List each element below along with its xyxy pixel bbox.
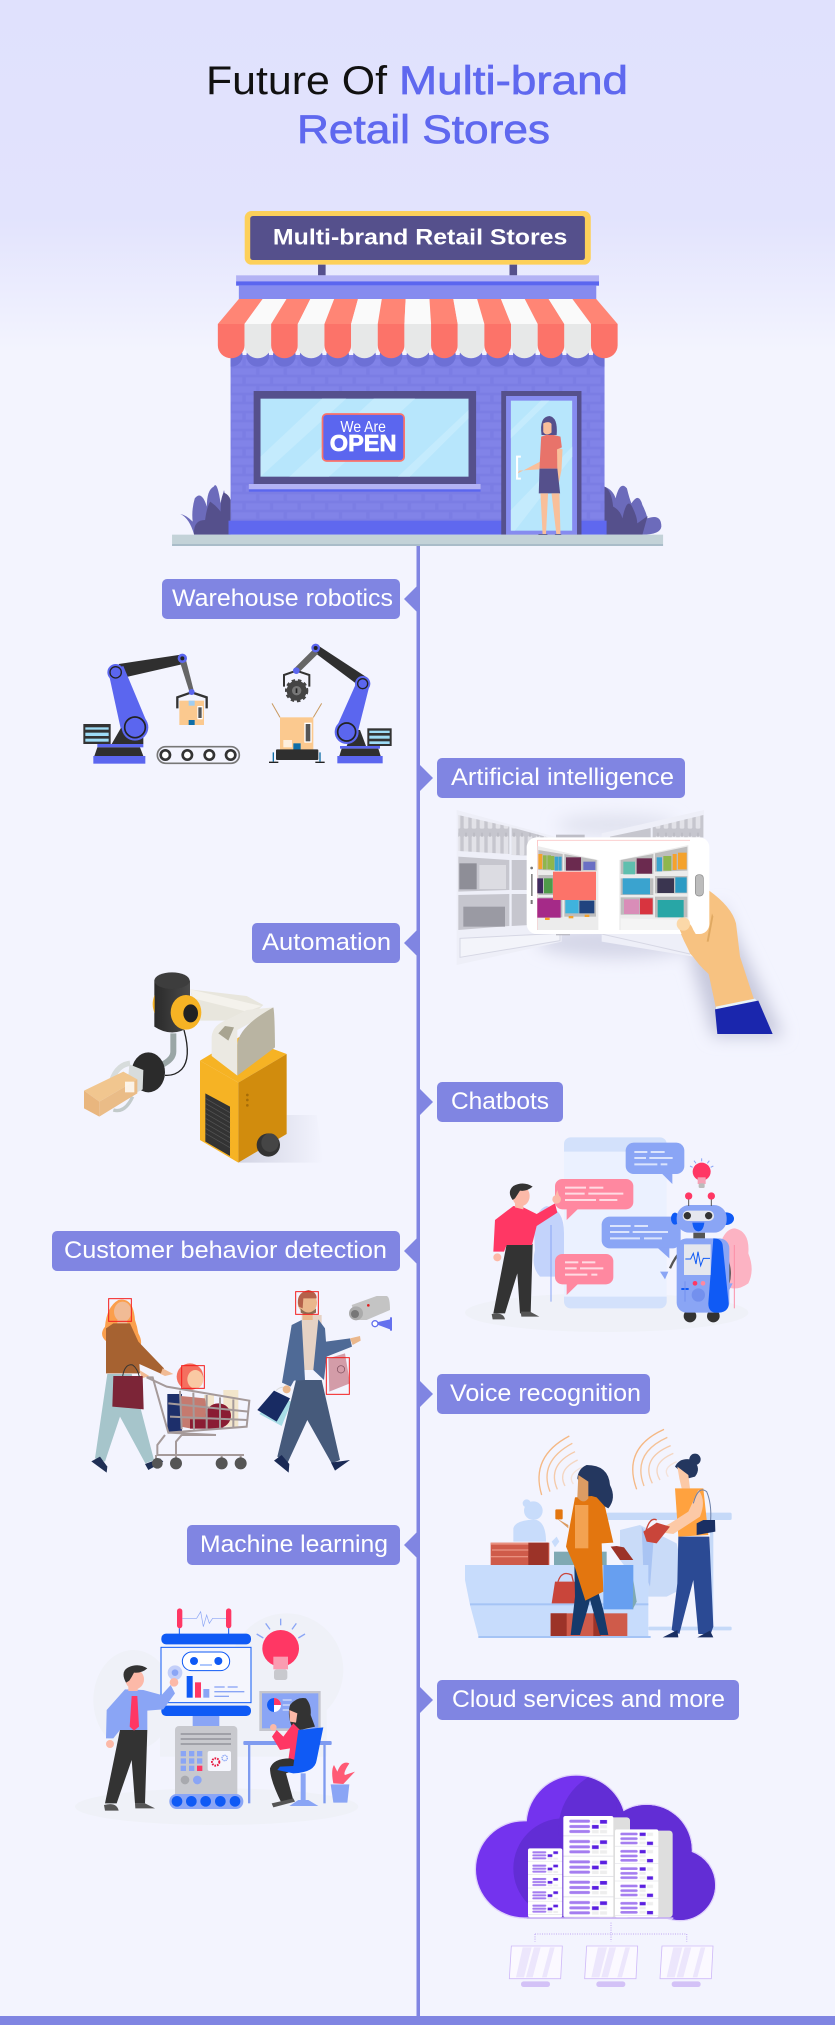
label: Cloud services and more [420, 1680, 739, 1720]
door [501, 391, 581, 535]
right pink tree [722, 1228, 752, 1308]
left robot arm [83, 654, 207, 764]
label: Machine learning: Machine learning [200, 1531, 388, 1558]
gripper [110, 1052, 165, 1111]
open sign: We Are [340, 419, 386, 436]
phone left shelf [537, 846, 598, 930]
woman with handbag [643, 1454, 715, 1637]
label: Customer behavior detection [52, 1231, 417, 1271]
server racks [527, 1816, 673, 1919]
tube and cable [162, 1030, 187, 1075]
lightbulb [690, 1158, 713, 1188]
grey left shelves [457, 810, 562, 965]
client computer 3 [660, 1946, 713, 1987]
label: Voice recognition: Voice recognition [450, 1380, 641, 1407]
sound waves [539, 1429, 677, 1495]
clothes rack [607, 1513, 732, 1630]
awning [218, 299, 618, 358]
blue bubble middle [602, 1217, 681, 1258]
window [249, 391, 481, 492]
soft shadow [537, 815, 783, 1037]
illustration: machine learning team [75, 1608, 358, 1825]
title: Multi-brand [399, 59, 628, 103]
open sign: OPEN [330, 430, 397, 456]
title: Future Of [206, 59, 388, 103]
desk and computer [243, 1691, 332, 1803]
illustration: cloud with servers [470, 1768, 723, 1987]
background top gradient band [0, 0, 835, 350]
label: Warehouse robotics [162, 579, 417, 619]
pavement [172, 535, 663, 546]
illustration: warehouse robots [83, 644, 392, 764]
grey right shelves [602, 810, 704, 958]
cardboard box [84, 1072, 137, 1117]
background blob [75, 1613, 358, 1825]
label: Automation: Automation [262, 929, 391, 956]
cloud [470, 1768, 723, 1923]
man [492, 1183, 561, 1319]
phone controls [530, 867, 703, 904]
title: Retail Stores [297, 108, 550, 152]
illustration: phone AR shelves [457, 810, 783, 1037]
plant [331, 1763, 355, 1803]
blue bubble top [626, 1143, 684, 1184]
counter [465, 1565, 651, 1638]
illustration: automation robot arm [84, 972, 323, 1163]
AR red marker [553, 872, 596, 900]
illustration: chatbot conversation [465, 1137, 752, 1332]
open sign [323, 414, 404, 461]
machine screen [161, 1634, 251, 1726]
client computer 1 [509, 1946, 562, 1987]
label: Chatbots: Chatbots [451, 1088, 549, 1115]
pink bubble top [555, 1179, 633, 1220]
right robot arm [269, 644, 392, 763]
label: Automation [252, 923, 417, 963]
black shoulder [153, 972, 201, 1032]
phone [527, 835, 709, 935]
woman at door [518, 416, 563, 536]
label: Cloud services and more: Cloud services and more [452, 1686, 725, 1713]
pink bubble bottom [555, 1254, 613, 1295]
robot [660, 1192, 734, 1322]
phone screen [564, 1137, 667, 1308]
left blue tree [534, 1206, 564, 1302]
white arm body [190, 989, 275, 1076]
shopping cart [147, 1363, 249, 1469]
timeline vertical line [416, 546, 420, 2016]
hand behind phone [678, 890, 754, 1008]
seated woman [270, 1698, 323, 1807]
hand thumb and sleeve [677, 913, 773, 1034]
floor shadow [238, 1115, 323, 1163]
man with bags [257, 1290, 361, 1473]
network connectors [535, 1923, 687, 1942]
label: Warehouse robotics: Warehouse robotics [172, 585, 393, 612]
illustration: voice recognition shoppers [465, 1429, 732, 1638]
man presenting [104, 1665, 182, 1811]
label: Artificial intelligence: Artificial intelligence [451, 764, 674, 791]
store sign: Multi-brand Retail Stores [273, 225, 567, 249]
stacked clothes on counter [491, 1543, 607, 1566]
machine cabinet [169, 1726, 243, 1809]
label: Machine learning [187, 1525, 417, 1565]
conveyor belt [157, 747, 239, 763]
store base band [229, 521, 607, 535]
title [206, 59, 628, 152]
bushes [180, 485, 661, 535]
illustration: customers under camera [91, 1290, 392, 1473]
brick wall [230, 352, 605, 521]
face detection boxes [109, 1292, 349, 1394]
label: Customer behavior detection: Customer behavior detection [64, 1237, 387, 1264]
light bulb [257, 1619, 305, 1680]
machine antennas [177, 1608, 231, 1634]
label: Voice recognition [420, 1374, 650, 1414]
ground [465, 1293, 748, 1332]
bottom bar [0, 2016, 835, 2025]
label: Chatbots [420, 1082, 563, 1122]
client computer 2 [585, 1946, 638, 1987]
store sign [245, 211, 591, 275]
clerk silhouette [513, 1499, 559, 1547]
security camera [349, 1296, 392, 1331]
woman in orange cardigan [552, 1465, 637, 1635]
phone right shelf [619, 845, 688, 930]
woman with cart [91, 1300, 173, 1473]
yellow cabinet [200, 1037, 287, 1163]
label: Artificial intelligence [420, 758, 685, 798]
illustration: retail storefront [172, 211, 663, 546]
roof cap [236, 275, 599, 299]
